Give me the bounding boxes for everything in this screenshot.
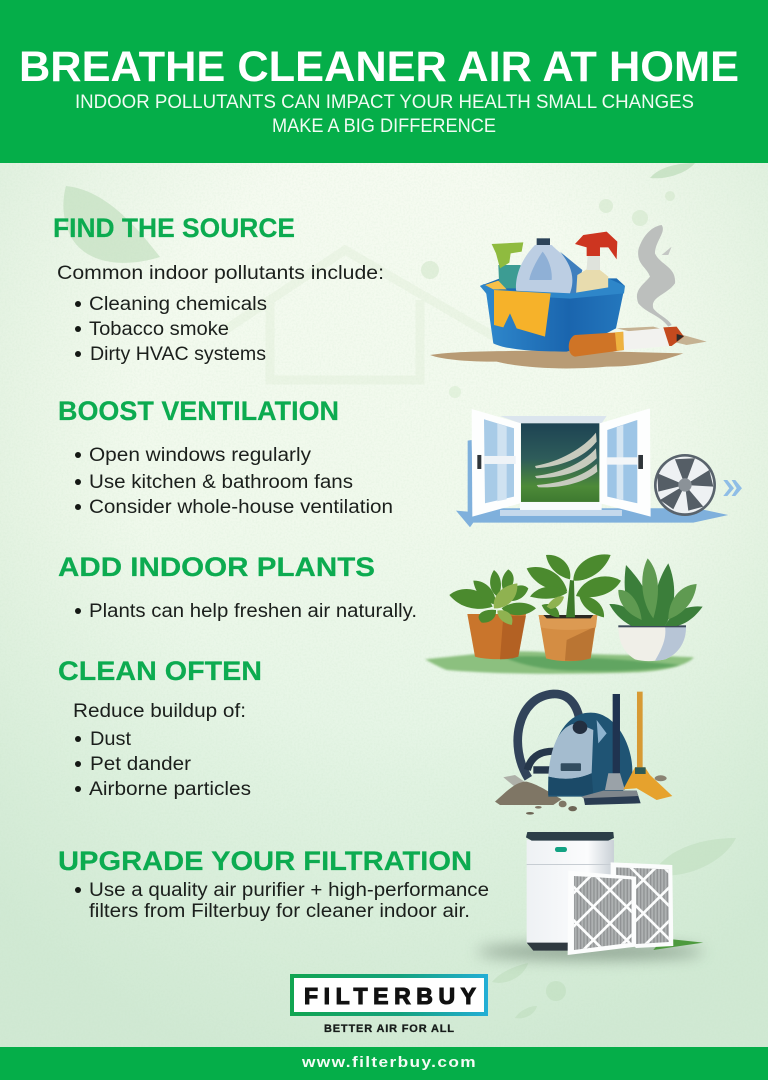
illustration: potted plants — [425, 554, 703, 674]
illustration: open window and fan — [456, 408, 742, 527]
section: clean often — [58, 656, 262, 800]
bullet list: Use kitchen & bathroom fans — [89, 472, 353, 493]
front filter — [568, 873, 636, 955]
subtitle — [75, 91, 694, 137]
section: add indoor plants — [58, 552, 417, 622]
title: BREATHE CLEANER AIR AT HOME — [19, 43, 739, 91]
bullet list: Tobacco smoke — [89, 319, 229, 340]
heading: ADD INDOOR PLANTS — [58, 552, 375, 582]
section: boost ventilation — [58, 396, 393, 518]
bullet list — [75, 729, 251, 800]
rear filter — [610, 862, 674, 948]
heading: BOOST VENTILATION — [58, 396, 339, 426]
bullet list: Consider whole-house ventilation — [89, 497, 393, 518]
logo: Filterbuy — [290, 974, 488, 1035]
section: upgrade your filtration — [58, 846, 489, 922]
bullet list: Open windows regularly — [89, 445, 312, 466]
bullet list: Dirty HVAC systems — [90, 344, 266, 365]
illustration: air purifier and filters — [476, 832, 704, 969]
intro text: Reduce buildup of: — [73, 701, 246, 722]
bullet text — [75, 880, 489, 922]
section: find the source — [53, 213, 384, 365]
logo wordmark: FILTERBUY — [304, 983, 476, 1009]
bullet list: Pet dander — [90, 754, 192, 775]
subtitle: INDOOR POLLUTANTS CAN IMPACT YOUR HEALTH SMALL CHANGES — [75, 91, 694, 113]
bullet: Plants can help freshen air naturally. — [89, 601, 417, 622]
tagline: BETTER AIR FOR ALL — [324, 1023, 454, 1035]
background decoration: leaves and faint house — [63, 163, 736, 1018]
bullet list — [75, 445, 393, 518]
website url: www.filterbuy.com — [301, 1054, 477, 1071]
illustration: cleaning supplies and cigarette — [430, 225, 707, 368]
bullet text: filters from Filterbuy for cleaner indoor air. — [89, 901, 470, 922]
heading: FIND THE SOURCE — [53, 213, 295, 243]
bullet list: Cleaning chemicals — [89, 294, 267, 315]
subtitle: MAKE A BIG DIFFERENCE — [272, 115, 496, 137]
bullet list: Dust — [90, 729, 132, 750]
heading: CLEAN OFTEN — [58, 656, 262, 686]
heading: UPGRADE YOUR FILTRATION — [58, 846, 472, 876]
footer bar — [0, 1047, 768, 1080]
bullet list: Airborne particles — [89, 779, 251, 800]
header banner — [0, 0, 768, 163]
bullet list — [75, 294, 267, 365]
illustration: vacuum cleaner and broom — [495, 692, 672, 815]
bullet text: Use a quality air purifier + high-performance — [89, 880, 489, 901]
intro text: Common indoor pollutants include: — [57, 263, 384, 284]
